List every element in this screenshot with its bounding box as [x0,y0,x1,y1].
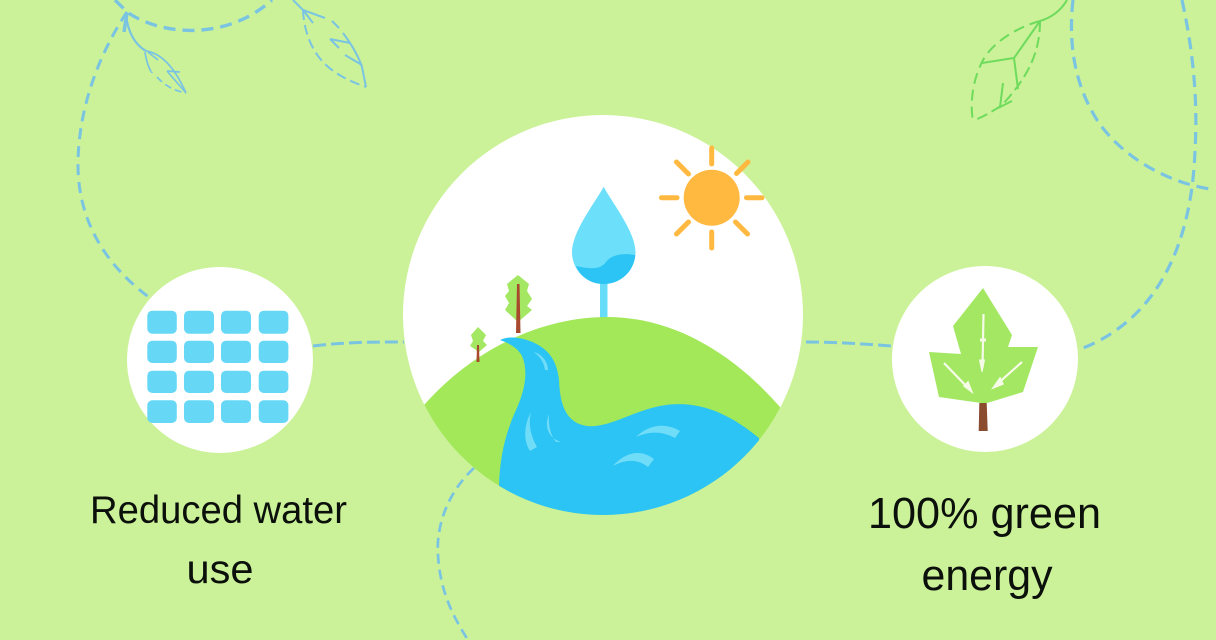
label: 100% green energy [868,489,1101,600]
landscape clipped to circle [424,317,780,515]
river highlights [525,352,680,467]
decorative leaf: top centre blue [293,0,366,87]
label: reduced water use: Reduced water [90,489,347,532]
panel: central landscape [403,115,803,515]
leaf arrows [944,314,1022,392]
label: reduced water use [90,489,347,592]
label: 100% green energy: 100% green [868,489,1101,538]
hill [424,317,780,515]
panel: reduced water use icon [127,267,313,453]
icon: water drop on stem [572,187,636,320]
decorative leaf: top left blue [124,13,186,93]
panel: green energy icon [892,266,1078,452]
label: 100% green energy: energy [922,551,1052,600]
river [499,338,759,515]
icon: tree trunk [979,403,988,431]
icon: water tile grid [147,311,288,423]
label: reduced water use: use [186,546,254,592]
icon: small tree [470,327,487,362]
icon: green leaf [929,288,1038,403]
icon: sun [662,148,762,248]
icon: tall tree [505,275,532,333]
decorative leaf: top right green [972,0,1067,121]
